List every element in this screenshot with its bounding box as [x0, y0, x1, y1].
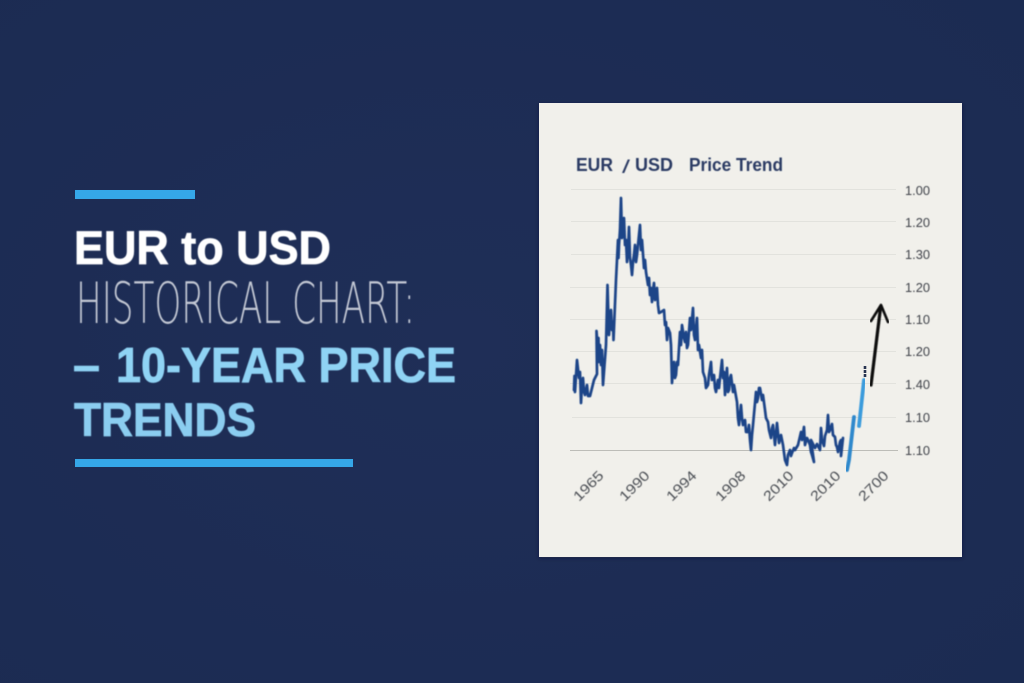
x axis labels: 1965 [570, 467, 607, 504]
title line: Historical Chart: HISTORICAL CHART: [76, 271, 415, 337]
price line [574, 198, 843, 465]
title block [73, 221, 456, 446]
chart title: EUR [576, 155, 613, 175]
y axis labels: 1.20 [905, 215, 930, 230]
y axis labels: 1.20 [905, 344, 930, 359]
x axis labels: 2700 [855, 467, 892, 504]
y axis labels: 1.10 [905, 312, 930, 327]
chart panel [539, 103, 962, 557]
y axis labels: 1.40 [905, 377, 930, 392]
panel background [539, 103, 962, 557]
y axis labels: 1.20 [905, 280, 930, 295]
grid lines [570, 190, 898, 450]
top accent bar [75, 190, 195, 199]
x axis labels [570, 467, 892, 504]
chart title: / [622, 157, 630, 177]
x axis labels: 1990 [616, 467, 653, 504]
y axis labels: 1.10 [905, 410, 930, 425]
highlighted recent rise [847, 380, 864, 470]
arrow: upward trend [871, 305, 888, 385]
y axis labels: 1.30 [905, 247, 930, 262]
bottom accent bar [75, 459, 353, 467]
y axis labels: 1.00 [905, 183, 930, 198]
y axis labels [905, 183, 930, 458]
y axis labels: 1.10 [905, 443, 930, 458]
title line: EUR to USD: EUR to USD [74, 221, 331, 274]
x axis labels: 2010 [760, 467, 797, 504]
title line: 10-year price: – [73, 339, 100, 393]
title line: trends: TRENDS [74, 393, 256, 446]
chart title [576, 155, 783, 177]
chart title: Price Trend [689, 155, 783, 175]
chart title: USD [635, 155, 673, 175]
x axis labels: 2010 [807, 467, 844, 504]
x axis labels: 1994 [663, 467, 700, 504]
x axis labels: 1908 [712, 467, 749, 504]
title line: 10-year price: 10-YEAR PRICE [116, 339, 456, 393]
line end marker [864, 366, 866, 377]
